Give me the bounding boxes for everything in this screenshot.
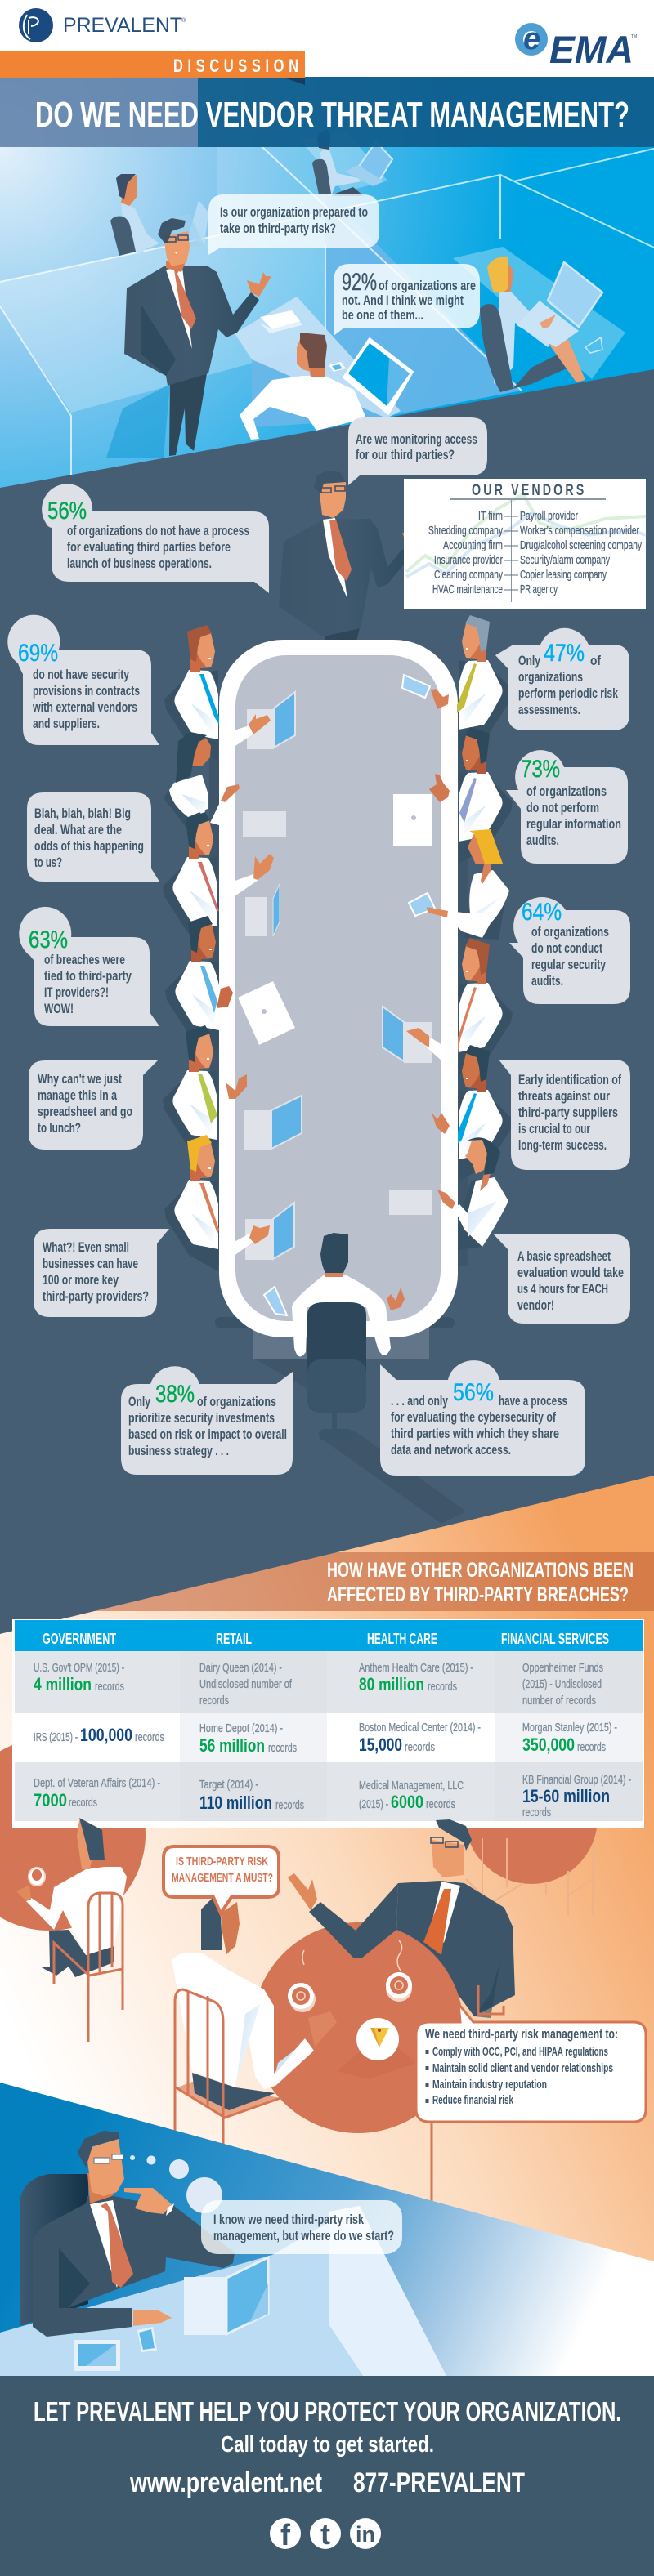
speech bubble: 56% no process: launch of business operations.: [67, 556, 212, 571]
speech bubble: monitoring access: Are we monitoring access: [356, 432, 477, 447]
speech bubble: 64%: regular security: [531, 958, 607, 972]
logo: EMA: TM: [631, 34, 637, 39]
chair leg under callout: [430, 2116, 433, 2206]
breaches table: records: [69, 1797, 97, 1810]
speech bubble: 69%: [7, 615, 159, 745]
social icons: f: [280, 2518, 291, 2551]
breaches table: [12, 1619, 644, 1828]
speech bubble: prepared: Is our organization prepared to: [220, 205, 368, 220]
breaches table: records: [426, 1798, 455, 1811]
speech bubble: small businesses: What?! Even small: [43, 1240, 129, 1255]
speech bubble: where do we start: [201, 2200, 402, 2254]
speech bubble: 56% no process: 56%: [47, 498, 87, 525]
breaches table: records: [275, 1799, 304, 1812]
speech bubble: 47%: 47%: [544, 640, 585, 667]
speech bubble: blah: to us?: [34, 855, 62, 870]
panel: our vendors: OUR VENDORS: [472, 481, 584, 499]
blue lower office background: [0, 2083, 654, 2376]
office scene background: [0, 77, 654, 493]
speech bubble: 38%: business strategy . . .: [128, 1444, 229, 1458]
breaches table: Medical Management, LLC: [359, 1779, 464, 1792]
speech bubble: 56% process: [380, 1360, 585, 1476]
speech bubble: 38%: based on risk or impact to overall: [128, 1427, 287, 1442]
speech bubble: blah: Blah, blah, blah! Big: [34, 806, 131, 821]
callout: is third-party risk management a must: IS THIRD-PARTY RISK: [176, 1855, 268, 1868]
speech bubble: 47%: perform periodic risk: [518, 686, 619, 701]
speech bubble: 92%: be one of them...: [342, 308, 423, 323]
speech bubble: 73%: [506, 750, 628, 864]
logo: Prevalent: PREVALENT: [63, 14, 182, 37]
speech bubble: 73%: do not perform: [526, 801, 599, 815]
speech bubble: 92%: not. And I think we might: [342, 293, 464, 308]
speech bubble: 69%: with external vendors: [32, 700, 137, 715]
speech bubble: small businesses: [34, 1229, 169, 1317]
figure: blonde worker right: [480, 257, 602, 392]
attendee left 4: [165, 916, 233, 1052]
breaches table: Anthem Health Care (2015) -: [359, 1662, 473, 1675]
footer band: [0, 2376, 654, 2576]
attendee right 1: [431, 615, 513, 752]
speech bubble: 47%: assessments.: [518, 703, 580, 717]
panel: our vendors: Shredding company: [428, 525, 504, 538]
white header background: [0, 0, 654, 78]
speech bubble: 56% no process: for evaluating third parties before: [67, 540, 231, 555]
figure: executive standing (top): [124, 218, 271, 456]
breaches table: (2015) - Undisclosed: [522, 1678, 602, 1691]
speech bubble: 38%: 38%: [155, 1381, 195, 1408]
restaurant table: [253, 1922, 464, 2133]
breaches table: records: [95, 1681, 124, 1694]
logo: EMA: e: [523, 22, 540, 56]
speech bubble: blah: deal. What are the: [34, 823, 122, 837]
speech bubble: basic spreadsheet: A basic spreadsheet: [517, 1249, 611, 1264]
figure: worker left: [110, 174, 208, 256]
speech bubble: monitoring access: for our third parties?: [356, 448, 455, 462]
figure: man at far left table: [16, 1818, 127, 2042]
attendee right 4: [406, 938, 513, 1074]
speech bubble: 47%: Only: [518, 654, 541, 668]
speech bubble: where do we start: I know we need third-party risk: [213, 2212, 365, 2227]
panel: our vendors: PR agency: [520, 583, 558, 596]
speech bubble: 56% process: 56%: [453, 1379, 494, 1406]
orange discussion ribbon: DISCUSSION: [173, 56, 298, 77]
breaches table: GOVERNMENT: [43, 1630, 116, 1647]
speech bubble: 73%: 73%: [521, 756, 560, 783]
callout: is third-party risk management a must: MANAGEMENT A MUST?: [172, 1871, 273, 1885]
thought bubbles: [130, 2155, 222, 2213]
breaches table: records: [405, 1741, 435, 1754]
breaches table: number of records: [522, 1694, 596, 1708]
breaches table: Undisclosed number of: [199, 1678, 293, 1691]
speech bubble: 38%: of organizations: [197, 1395, 276, 1409]
speech bubble: early identification: Early identification of: [518, 1073, 621, 1087]
breaches table: records: [268, 1742, 297, 1755]
speech bubble: early identification: is crucial to our: [518, 1122, 590, 1136]
logo: EMA: [515, 22, 637, 71]
speech bubble: small businesses: 100 or more key: [43, 1273, 119, 1288]
breaches table: HEALTH CARE: [367, 1630, 437, 1647]
logo: EMA: EMA: [549, 28, 634, 71]
speech bubble: 64%: audits.: [531, 974, 563, 989]
footer call to action: [34, 2396, 621, 2498]
speech bubble: 56% process: for evaluating the cybersecurity of: [391, 1410, 556, 1425]
breaches table: 100,000: [80, 1725, 132, 1745]
figure: thinking executive at desk: [20, 2131, 235, 2337]
speech bubble: 63%: [19, 907, 159, 1026]
speech bubble: basic spreadsheet: evaluation would take: [517, 1266, 624, 1280]
breaches table: records: [199, 1694, 229, 1708]
breaches table: records: [522, 1806, 551, 1819]
speech bubble: spreadsheet lunch: manage this in a: [38, 1088, 118, 1103]
speech bubble: 47%: of: [590, 654, 601, 668]
speech bubble: basic spreadsheet: us 4 hours for EACH: [517, 1282, 608, 1297]
breaches table: 7000: [34, 1790, 67, 1810]
breaches table: IRS (2015) -: [34, 1731, 78, 1744]
callout: need third-party risk management: [416, 2004, 646, 2122]
speech bubble: 69%: provisions in contracts: [33, 684, 140, 699]
breaches table: RETAIL: [216, 1630, 252, 1647]
dark slate background: [0, 369, 654, 1634]
logo: Prevalent: [19, 8, 186, 42]
speech bubble: 63%: 63%: [29, 926, 68, 953]
breaches table: Oppenheimer Funds: [522, 1662, 603, 1675]
breaches table: 80 million: [359, 1674, 424, 1694]
breaches table: records: [135, 1731, 164, 1744]
panel: our vendors: [404, 479, 646, 609]
breaches table: 15-60 million: [522, 1786, 610, 1806]
speech bubble: 63%: IT providers?!: [44, 985, 109, 1000]
attendee left 3: [163, 812, 274, 949]
breaches table: Target (2014) -: [199, 1779, 258, 1792]
speech bubble: 64%: 64%: [522, 899, 562, 926]
speech bubble: 38%: prioritize security investments: [128, 1411, 275, 1426]
panel: our vendors: Insurance provider: [434, 554, 503, 567]
attendee right 5: [432, 1045, 513, 1181]
speech bubble: 38%: Only: [128, 1395, 151, 1409]
panel: our vendors: Security/alarm company: [520, 554, 611, 567]
speech bubble: small businesses: businesses can have: [43, 1257, 138, 1271]
section heading: third-party breaches: [327, 1559, 634, 1606]
callout: need third-party risk management: Reduce financial risk: [432, 2094, 514, 2107]
desk devices: monitor, tablet, phone: [74, 2257, 268, 2371]
panel: our vendors: Accounting firm: [443, 539, 503, 552]
speech bubble: prepared: [208, 194, 379, 255]
conference table: [215, 640, 458, 1359]
figure: suited man arm over table: [288, 1873, 398, 1958]
callout: is third-party risk management a must: [164, 1846, 279, 1913]
peach background section: [0, 1476, 654, 2376]
speech bubble: 73%: regular information: [526, 817, 621, 832]
speech bubble: 69%: and suppliers.: [33, 717, 100, 731]
speech bubble: spreadsheet lunch: spreadsheet and go: [38, 1105, 132, 1119]
speech bubble: small businesses: third-party providers?: [43, 1289, 149, 1304]
breaches table: 4 million: [34, 1674, 92, 1694]
speech bubble: 73%: of organizations: [526, 784, 607, 799]
speech bubble: 63%: tied to third-party: [44, 969, 132, 984]
figure: man with back turned: [172, 1898, 314, 2145]
speech bubble: prepared: take on third-party risk?: [220, 221, 336, 236]
speech bubble: where do we start: management, but where do we start?: [213, 2229, 394, 2243]
table items: laptops, tablets and papers: [238, 675, 435, 1315]
speech bubble: 63%: of breaches were: [44, 953, 125, 967]
attendee at head of table with chair: [292, 1233, 405, 1440]
title band: [0, 77, 654, 147]
speech bubble: 47%: organizations: [518, 670, 583, 685]
orange discussion ribbon: [0, 51, 305, 85]
speech bubble: 92%: [334, 264, 480, 336]
attendee right 2: [429, 727, 513, 864]
speech bubble: 73%: audits.: [526, 833, 559, 848]
breaches table: Boston Medical Center (2014) -: [359, 1721, 481, 1734]
social icons: in: [356, 2522, 375, 2547]
breaches table: Dairy Queen (2014) -: [199, 1662, 282, 1675]
breaches table: 6000: [391, 1792, 423, 1812]
attendee left 1: [164, 625, 271, 761]
speech bubble: blah: odds of this happening: [34, 839, 144, 854]
speech bubble: 56% process: . . . and only: [391, 1394, 449, 1409]
attendee left 5: [163, 1025, 247, 1162]
speech bubble: 92%: 92%: [342, 269, 377, 296]
breaches table: Home Depot (2014) -: [199, 1722, 283, 1735]
figure: worker top centre: [312, 130, 392, 196]
figure: suited man torso behind restaurant table: [396, 1819, 515, 2018]
footer call to action: Call today to get started.: [221, 2431, 434, 2457]
breaches table: records: [428, 1681, 457, 1694]
breaches table: 15,000: [359, 1734, 402, 1755]
speech bubble: 63%: WOW!: [44, 1002, 74, 1016]
speech bubble: 64%: of organizations: [531, 925, 609, 940]
panel: our vendors: IT firm: [478, 510, 503, 523]
speech bubble: 69%: 69%: [18, 640, 58, 667]
callout: need third-party risk management: Maintain industry reputation: [432, 2078, 547, 2092]
speech bubble: 56% process: third parties with which they share: [391, 1426, 559, 1441]
speech bubble: 64%: do not conduct: [531, 941, 602, 956]
breaches table: (2015) -: [359, 1798, 388, 1811]
speech bubble: 92%: of organizations are: [379, 279, 476, 293]
speech bubble: basic spreadsheet: vendor!: [517, 1298, 554, 1313]
speech bubble: 56% process: data and network access.: [391, 1443, 511, 1458]
speech bubble: spreadsheet lunch: Why can't we just: [38, 1072, 122, 1087]
attendee right 3: [427, 829, 509, 940]
coffee cups and dessert plate: [288, 1940, 412, 2116]
social icons: [270, 2517, 381, 2551]
speech bubble: blah: [27, 792, 159, 882]
speech bubble: 47%: [495, 628, 629, 730]
speech bubble: spreadsheet lunch: to lunch?: [38, 1121, 81, 1136]
speech bubble: spreadsheet lunch: [29, 1060, 158, 1150]
breaches table: 110 million: [199, 1792, 272, 1813]
panel: our vendors: Copier leasing company: [520, 569, 607, 582]
floor shadows under conference table: [209, 703, 468, 1524]
attendee left 6: [164, 1135, 270, 1271]
breaches table: Dept. of Veteran Affairs (2014) -: [34, 1777, 160, 1790]
breaches table: 350,000: [522, 1734, 575, 1755]
speech bubble: early identification: third-party suppliers: [518, 1105, 618, 1120]
attendee right 6: [437, 1137, 508, 1250]
attendee left 2: [164, 732, 240, 832]
speech bubble: 64%: [509, 897, 630, 1004]
speech bubble: basic spreadsheet: [494, 1234, 630, 1324]
speech bubble: 69%: do not have security: [33, 667, 130, 682]
panel: our vendors: Payroll provider: [520, 510, 578, 523]
speech bubble: 56% no process: [42, 484, 269, 593]
figure: presenting executive: [279, 471, 425, 641]
footer call to action: www.prevalent.net: [129, 2467, 322, 2498]
panel: our vendors: Cleaning company: [434, 569, 504, 582]
breaches table: U.S. Gov't OPM (2015) -: [34, 1662, 124, 1675]
speech bubble: 38%: [121, 1366, 293, 1475]
figure: seated man with tablet: [240, 333, 413, 440]
breaches table: records: [577, 1741, 606, 1754]
speech bubble: early identification: [499, 1060, 630, 1170]
speech bubble: 56% no process: of organizations do not have a process: [67, 524, 249, 538]
logo: Prevalent: ®: [181, 17, 186, 24]
speech bubble: early identification: long-term success.: [518, 1138, 607, 1153]
speech bubble: monitoring access: [348, 417, 487, 485]
breaches table: Morgan Stanley (2015) -: [522, 1721, 617, 1734]
breaches table: 56 million: [199, 1735, 265, 1756]
social icons: t: [320, 2517, 330, 2551]
panel: our vendors: HVAC maintenance: [432, 583, 503, 596]
speech bubble: 56% process: have a process: [499, 1394, 567, 1409]
footer call to action: 877-PREVALENT: [353, 2467, 525, 2498]
speech bubble: early identification: threats against our: [518, 1089, 610, 1104]
